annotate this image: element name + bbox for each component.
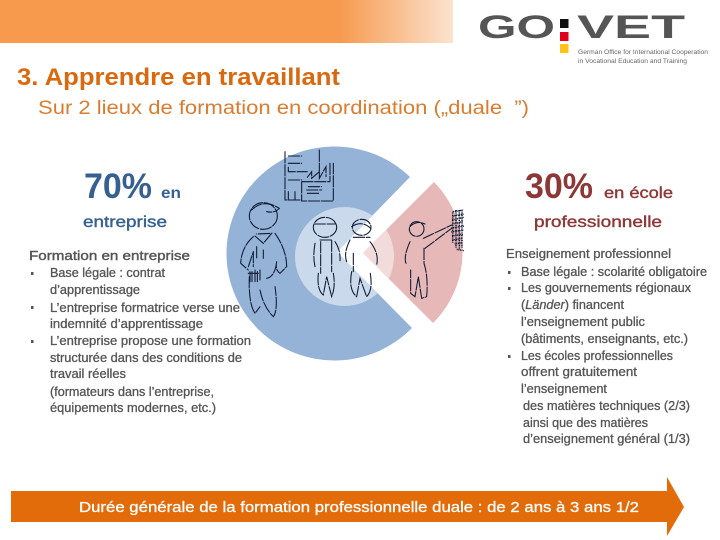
heading: Enseignement professionnel: Enseignement professionnel: [506, 247, 671, 261]
bullet list: indemnité d’apprentissage: [50, 317, 203, 331]
icon: second apprentice: [346, 219, 377, 297]
bullet list: Base légale : scolarité obligatoire: [521, 265, 707, 279]
pie diagram: 70 / 30: [226, 146, 464, 360]
bullet list: L’entreprise formatrice verse une: [50, 301, 240, 315]
bullet list: Les écoles professionnelles: [521, 349, 673, 363]
pink sector: school: [363, 182, 463, 323]
bullet list: [31, 266, 251, 415]
panel: vocational school: [506, 167, 707, 446]
stat: 30%: professionnelle: [534, 214, 662, 231]
bullet list: l’enseignement public: [521, 315, 645, 329]
arrow: training duration: Durée générale de la formation professionnelle duale : de 2 ans à 3 ans 1/2: [79, 499, 639, 516]
stat: 30%: en école: [604, 185, 673, 202]
bullet list: (bâtiments, enseignants, etc.): [521, 332, 688, 346]
icon: worker with tools: [241, 203, 287, 317]
inner pink circle: [364, 230, 394, 278]
stat: 70%: entreprise: [83, 214, 167, 231]
sketch illustrations: [241, 150, 464, 317]
icon: teacher at board: [405, 222, 452, 298]
stat: 70%: en: [161, 185, 181, 202]
bullet list: d’enseignement général (1/3): [523, 432, 690, 446]
subtitle: Sur 2 lieux de formation en coordination („duale ”): [38, 98, 529, 119]
bullet list: Les gouvernements régionaux: [521, 281, 692, 295]
logo: GOVET: in Vocational Education and Training: [578, 58, 687, 65]
stat: 30%: 30%: [525, 167, 593, 206]
bullet list: des matières techniques (2/3): [523, 399, 690, 413]
bullet list: (Länder) financent: [521, 298, 625, 312]
bullet list: équipements modernes, etc.): [50, 401, 216, 415]
logo: GOVET: German Office for International Cooperation: [578, 49, 708, 56]
stat: 70%: [83, 167, 181, 231]
bullet list: L’entreprise propose une formation: [50, 334, 251, 348]
icon: apprentice: [313, 217, 340, 297]
logo: GOVET: GO: [478, 9, 555, 45]
logo: GOVET: VET: [577, 9, 686, 45]
bullet list: (formateurs dans l’entreprise,: [50, 385, 214, 399]
bullet list: Base légale : contrat: [50, 266, 166, 280]
stat: 30%: [525, 167, 673, 231]
bullet list: offrent gratuitement: [521, 365, 638, 379]
bullet list: ainsi que des matières: [523, 416, 648, 430]
title: 3. Apprendre en travaillant: [17, 64, 340, 91]
bullet list: d’apprentissage: [50, 283, 140, 297]
panel: company training: [29, 167, 251, 415]
bullet list: [508, 265, 707, 446]
inner blue circle: [295, 207, 378, 306]
bullet list: l’enseignement: [521, 382, 608, 396]
blue sector: company: [226, 146, 412, 360]
bullet list: structurée dans des conditions de: [50, 351, 242, 365]
icon: blackboard: [451, 210, 464, 251]
arrow: training duration: [11, 477, 684, 536]
heading: Formation en entreprise: Formation en entreprise: [29, 248, 190, 263]
icon: factory: [285, 150, 333, 201]
stat: 70%: 70%: [84, 167, 152, 206]
logo: GOVET: [478, 9, 708, 65]
header gradient band: [0, 0, 453, 43]
bullet list: travail réelles: [50, 367, 126, 381]
